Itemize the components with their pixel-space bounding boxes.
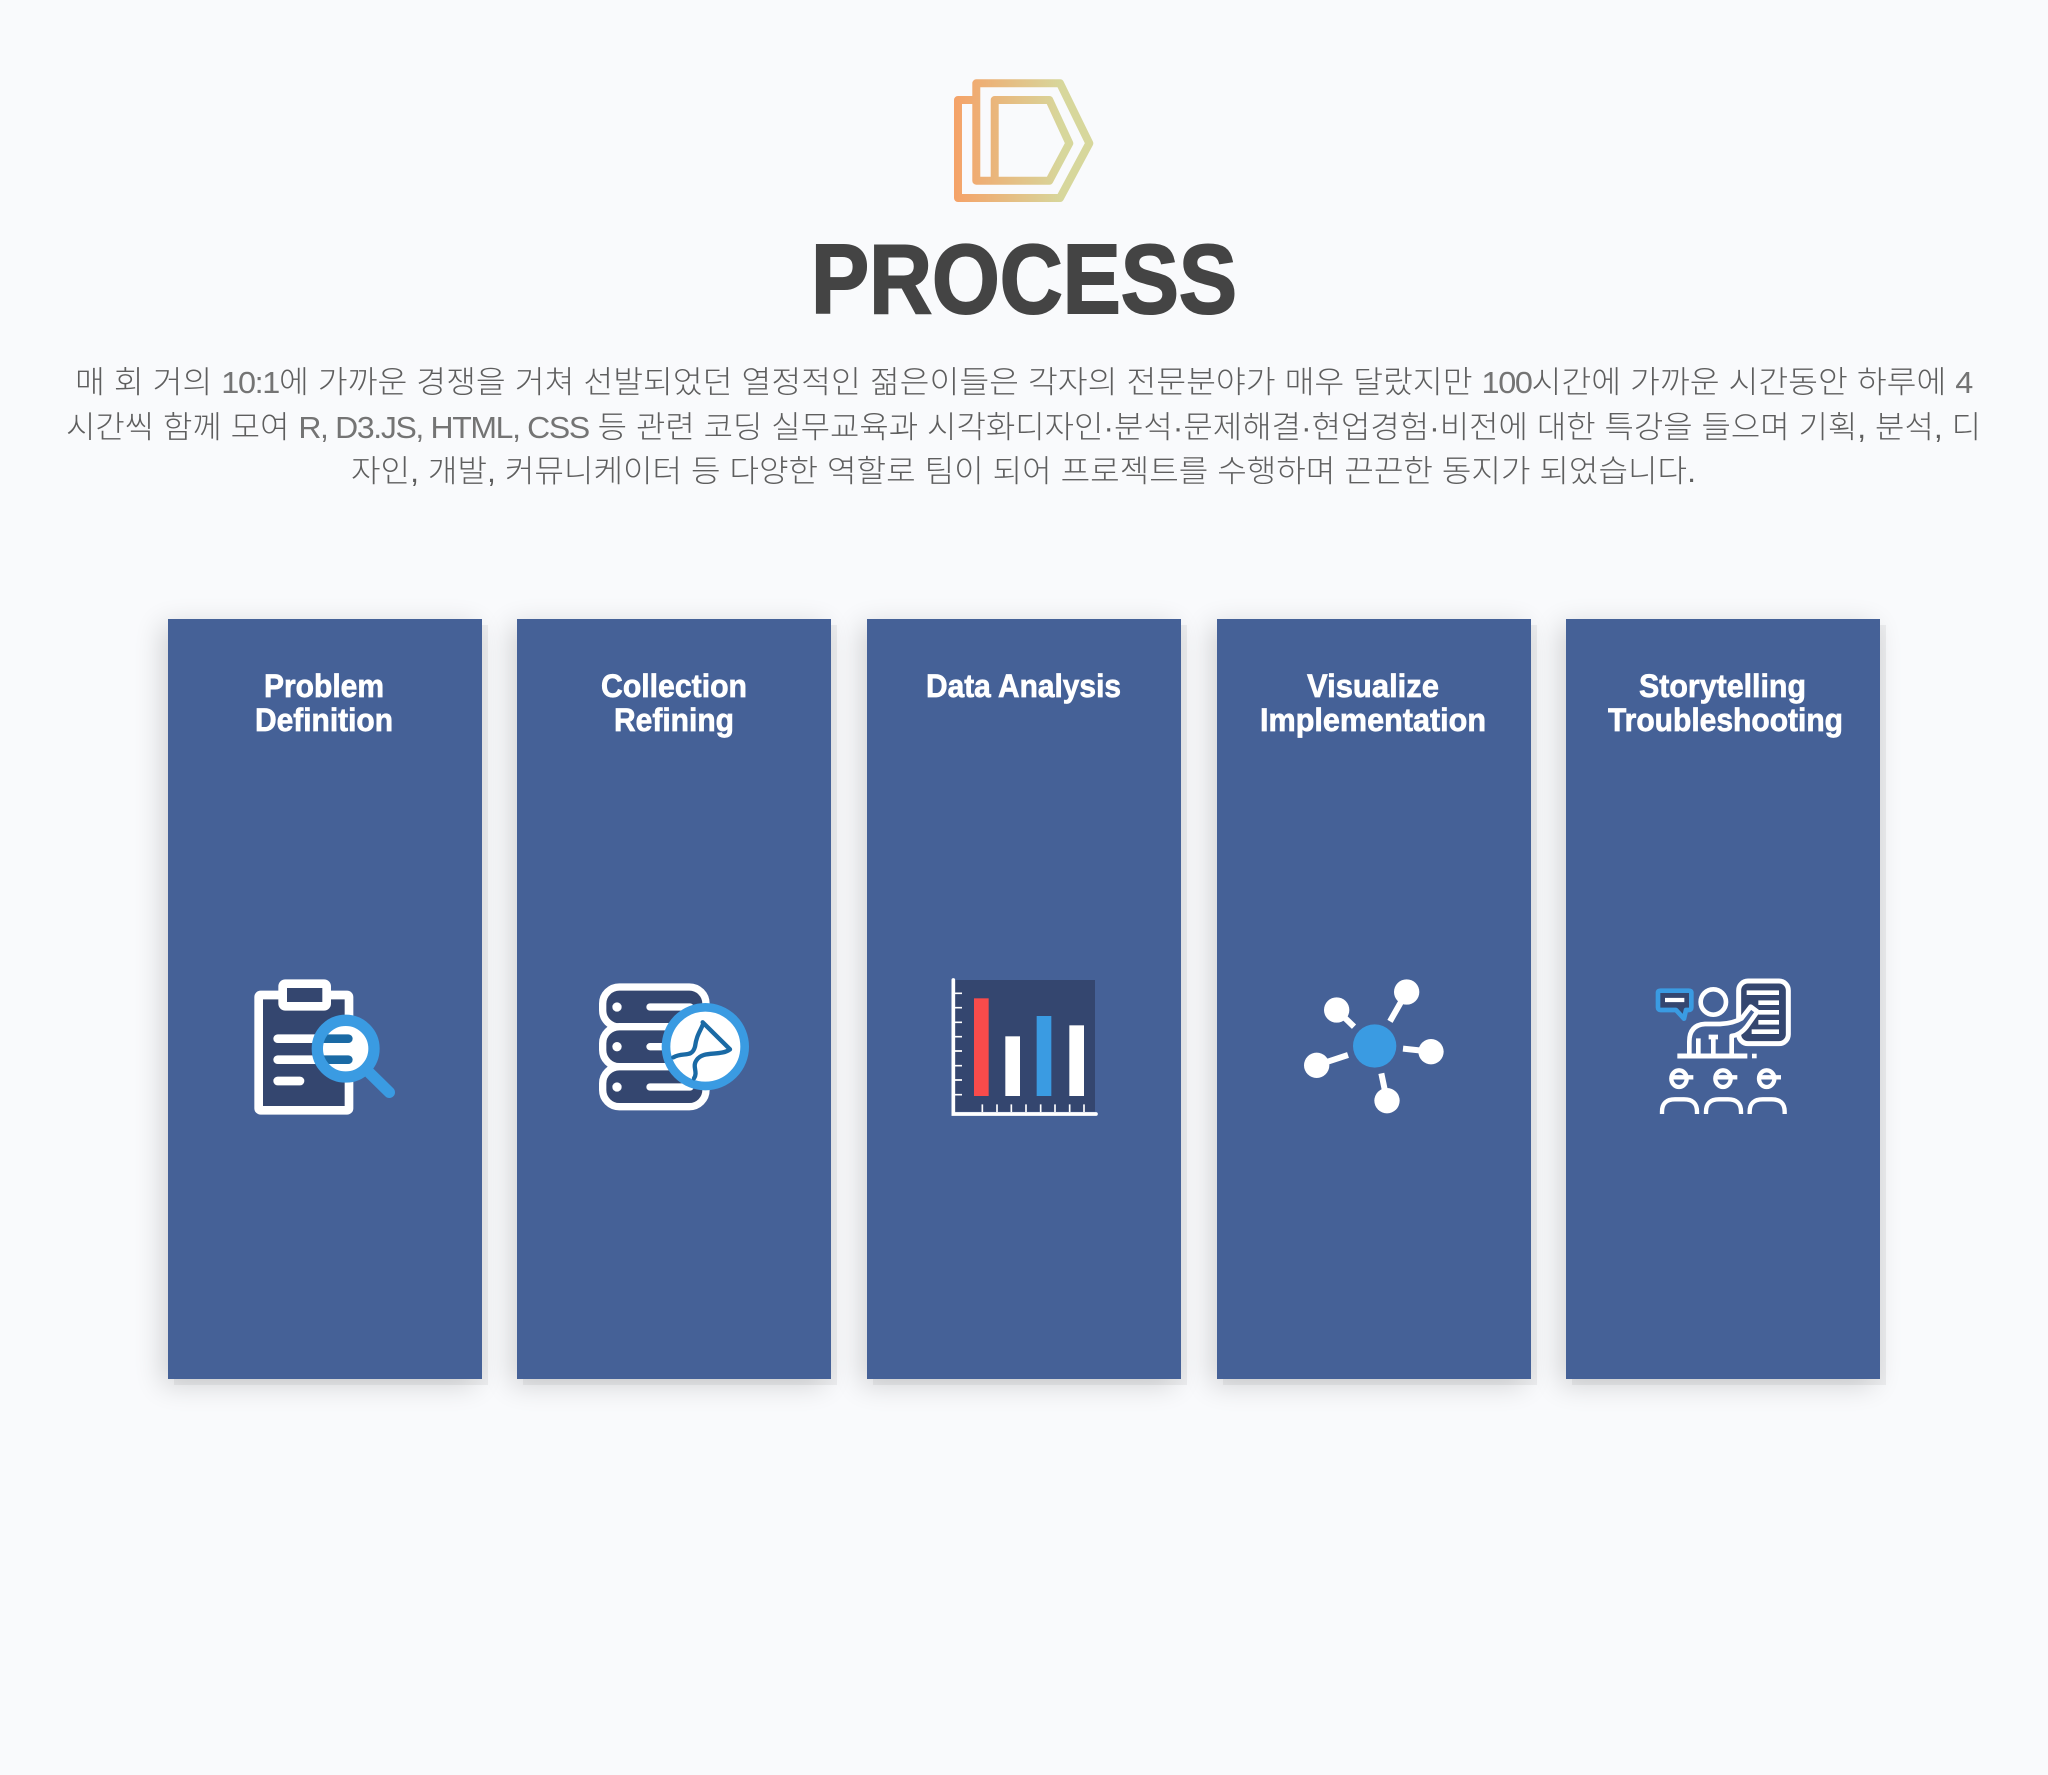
icon: database with data curve	[603, 987, 745, 1107]
heading: Problem Definition	[255, 668, 393, 738]
panel: Data Analysis	[867, 619, 1181, 1379]
panel: Storytelling Troubleshooting	[1566, 619, 1880, 1379]
panel: Problem Definition	[168, 619, 482, 1379]
heading: Visualize Implementation: Implementation	[1260, 702, 1486, 738]
panel: Visualize Implementation	[1217, 619, 1531, 1379]
icon: presenter with audience	[1658, 981, 1788, 1114]
heading: Visualize Implementation	[1260, 668, 1486, 738]
heading: Visualize Implementation: Visualize	[1307, 668, 1439, 704]
heading: Problem Definition: Problem	[264, 668, 384, 704]
logo icon	[954, 79, 1094, 202]
intro paragraph	[66, 365, 1981, 489]
intro paragraph: 매 회 거의 10:1에 가까운 경쟁을 거쳐 선발되었던 열정적인 젊은이들은 각자의 전문분야가 매우 달랐지만 100시간에 가까운 시간동안 하루에 4	[75, 365, 1973, 400]
icon: clipboard with magnifier	[259, 984, 389, 1110]
heading: Collection Refining	[601, 668, 747, 738]
intro paragraph: 자인, 개발, 커뮤니케이터 등 다양한 역할로 팀이 되어 프로젝트를 수행하며 끈끈한 동지가 되었습니다.	[351, 454, 1696, 489]
panel: Collection Refining	[517, 619, 831, 1379]
heading: Data Analysis: Data Analysis	[926, 668, 1121, 704]
heading: Storytelling Troubleshooting: Storytelling	[1639, 668, 1806, 704]
heading: Storytelling Troubleshooting: Troubleshooting	[1608, 702, 1843, 738]
heading: Collection Refining: Refining	[614, 702, 734, 738]
heading: Collection Refining: Collection	[601, 668, 747, 704]
intro paragraph: 시간씩 함께 모여 R, D3.JS, HTML, CSS 등 관련 코딩 실무교육과 시각화디자인·분석·문제해결·현업경험·비전에 대한 특강을 들으며 기획, 분석, 디	[66, 410, 1981, 445]
heading: Storytelling Troubleshooting	[1608, 668, 1843, 738]
icon: bar chart	[953, 980, 1096, 1114]
icon: network nodes	[1304, 979, 1444, 1113]
heading: Problem Definition: Definition	[255, 702, 393, 738]
